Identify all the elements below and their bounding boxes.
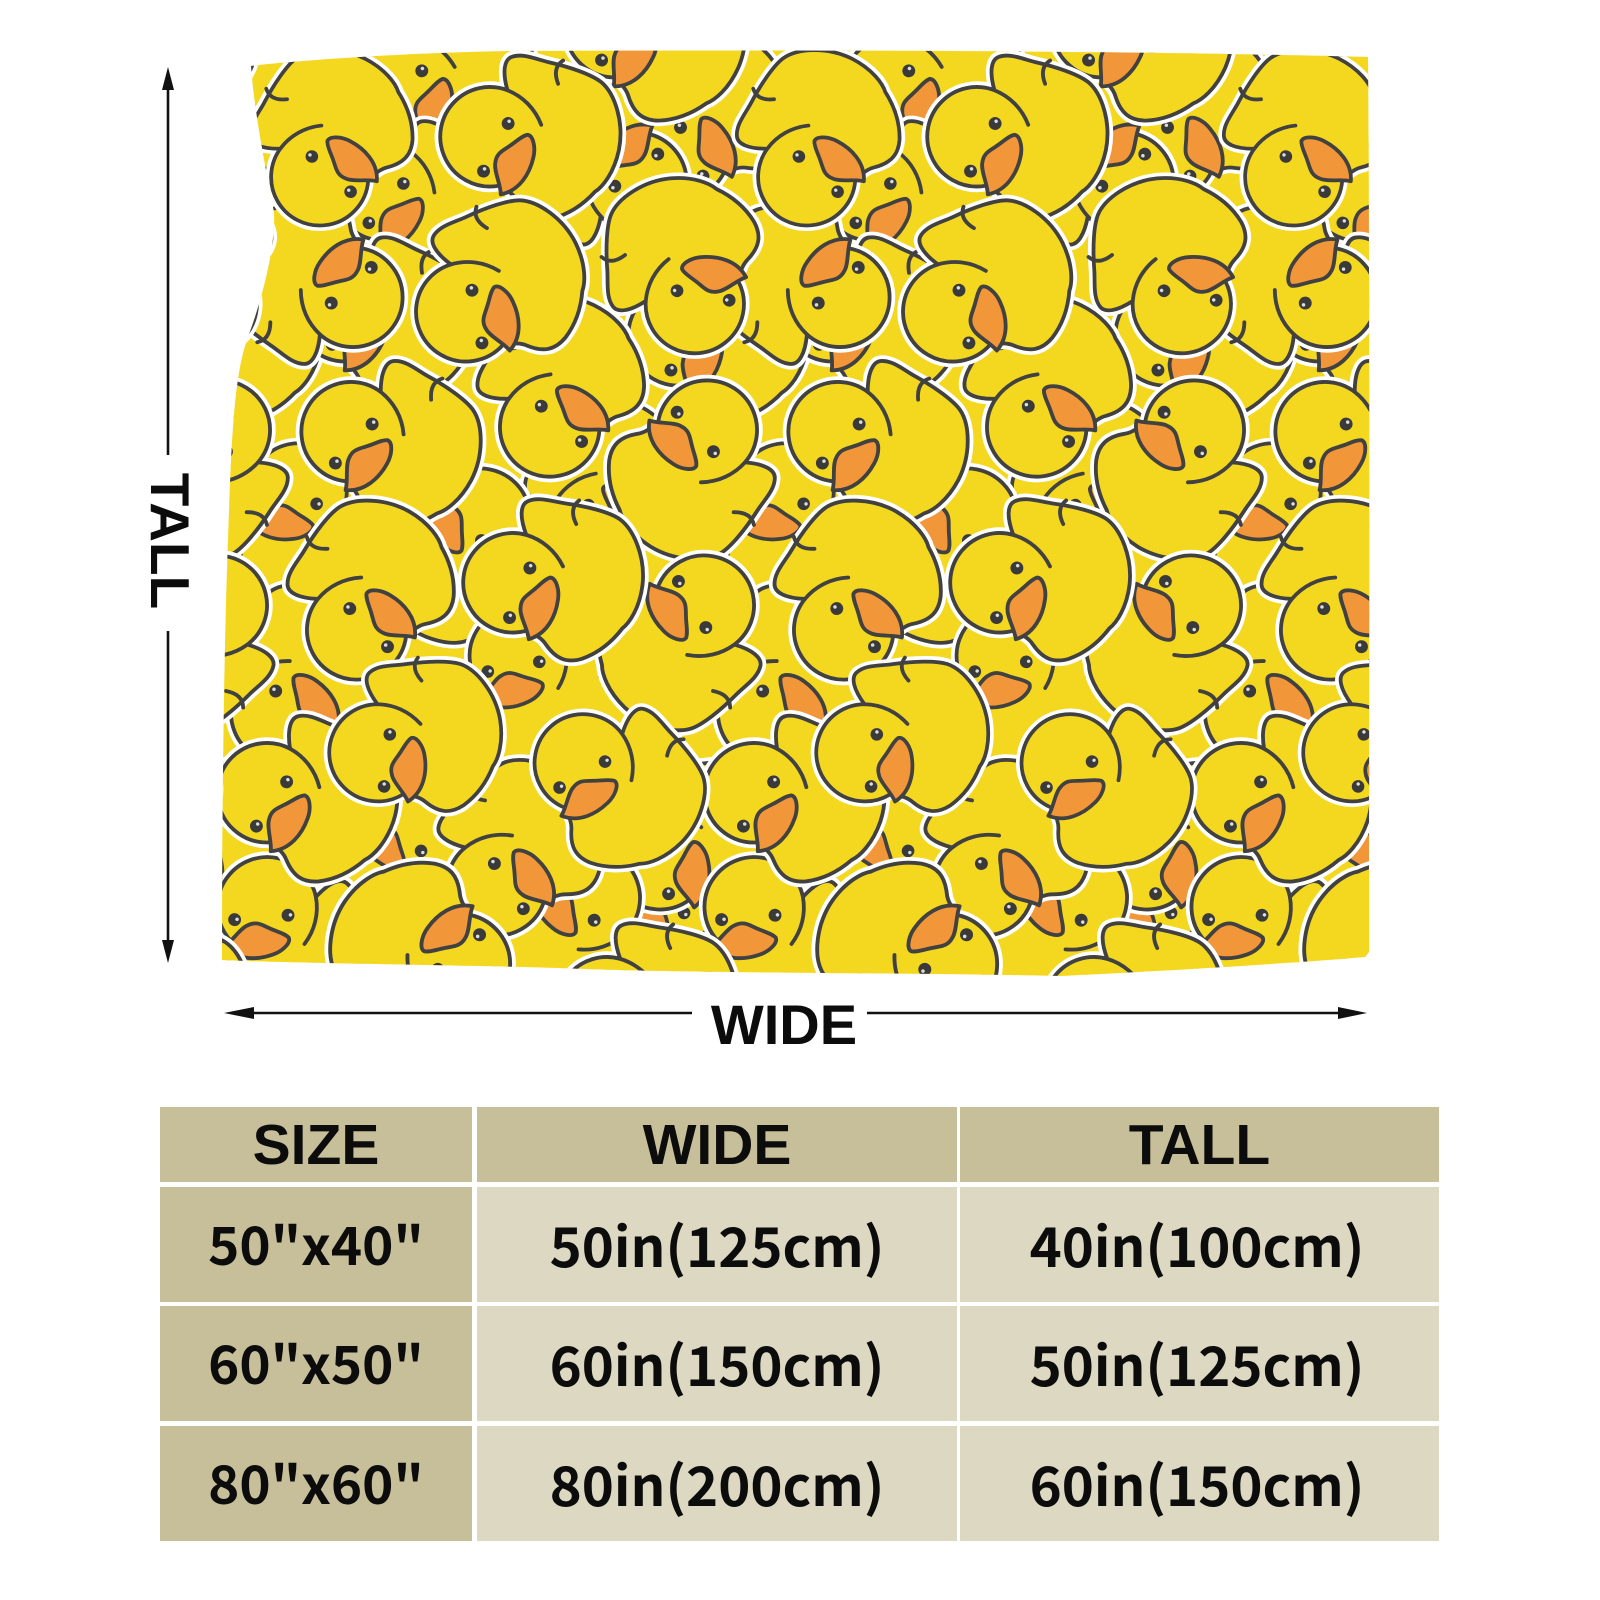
row 1 tall [960, 1187, 1439, 1302]
row 1 size [160, 1187, 472, 1302]
header: SIZE [160, 1107, 472, 1182]
row 1 wide: 50in(125cm) [550, 1204, 884, 1282]
arrow: tall, upper [162, 67, 174, 455]
header: TALL: TALL [1129, 1112, 1270, 1176]
row 1 wide [477, 1187, 957, 1302]
row 3 size [160, 1426, 472, 1541]
label: TALL: TALL [139, 473, 201, 609]
row 2 wide [477, 1306, 957, 1421]
size table [160, 1107, 1439, 1541]
blanket illustration with arrows [139, 50, 1370, 1056]
blanket with rubber duck pattern [222, 50, 1370, 976]
row 1 size: 50"x40" [208, 1205, 424, 1281]
row 3 wide: 80in(200cm) [550, 1442, 884, 1522]
arrow: wide, right [867, 1007, 1367, 1019]
arrow: tall, lower [162, 631, 174, 963]
row 3 size: 80"x60" [208, 1444, 424, 1520]
header: WIDE: WIDE [643, 1112, 791, 1176]
header: WIDE [477, 1107, 957, 1182]
header: SIZE: SIZE [253, 1112, 379, 1176]
header: TALL [960, 1107, 1439, 1182]
row 2 tall [960, 1306, 1439, 1421]
arrow: wide, left [224, 1007, 692, 1019]
row 2 wide: 60in(150cm) [550, 1322, 884, 1402]
row 2 size: 60"x50" [208, 1324, 424, 1400]
row 3 tall [960, 1426, 1439, 1541]
row 2 size [160, 1306, 472, 1421]
row 1 tall: 40in(100cm) [1030, 1204, 1364, 1282]
row 2 tall: 50in(125cm) [1030, 1322, 1364, 1402]
row 3 tall: 60in(150cm) [1030, 1442, 1364, 1522]
label: WIDE: WIDE [711, 993, 857, 1056]
row 3 wide [477, 1426, 957, 1541]
